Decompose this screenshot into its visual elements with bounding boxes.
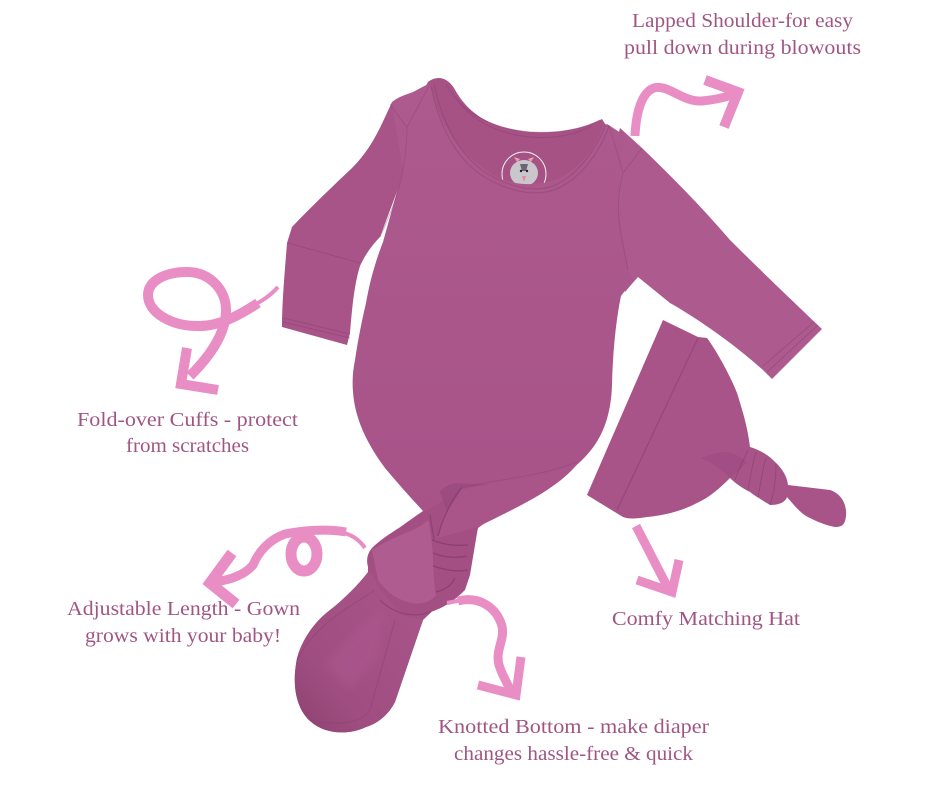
right sleeve (600, 128, 822, 379)
gown illustration (282, 78, 822, 732)
left sleeve (282, 102, 420, 345)
label: fold-over cuffs: from scratches (126, 435, 249, 457)
hat shape (587, 320, 846, 527)
arrow: fold-over cuffs (148, 272, 278, 390)
arrow: lapped shoulder (635, 80, 738, 136)
gown neck interior (415, 78, 612, 210)
label: lapped shoulder: Lapped Shoulder-for easy (632, 10, 853, 32)
knot tail (295, 572, 423, 732)
gown body (295, 83, 633, 732)
neck label logo (502, 152, 546, 196)
label: knotted bottom: Knotted Bottom - make diaper (438, 716, 709, 738)
arrow: matching hat (636, 526, 679, 592)
label: fold-over cuffs: Fold-over Cuffs - protect (77, 409, 298, 431)
label: adjustable length: grows with your baby! (85, 625, 281, 647)
label: lapped shoulder: pull down during blowouts (624, 37, 861, 59)
neckline stitching and seams (431, 84, 609, 193)
bottom flap (437, 459, 581, 538)
loop (291, 537, 317, 571)
left cuff (283, 243, 360, 338)
hat knot folds (735, 450, 776, 504)
arrow: adjustable length (210, 530, 365, 604)
label: matching hat: Comfy Matching Hat (612, 608, 800, 630)
arrow: knotted bottom (447, 600, 521, 695)
knot (367, 500, 478, 614)
label: adjustable length: Adjustable Length - Gown (67, 598, 300, 620)
hat illustration (587, 320, 846, 527)
right cuff (763, 322, 818, 372)
label: knotted bottom: changes hassle-free & quick (454, 743, 693, 765)
